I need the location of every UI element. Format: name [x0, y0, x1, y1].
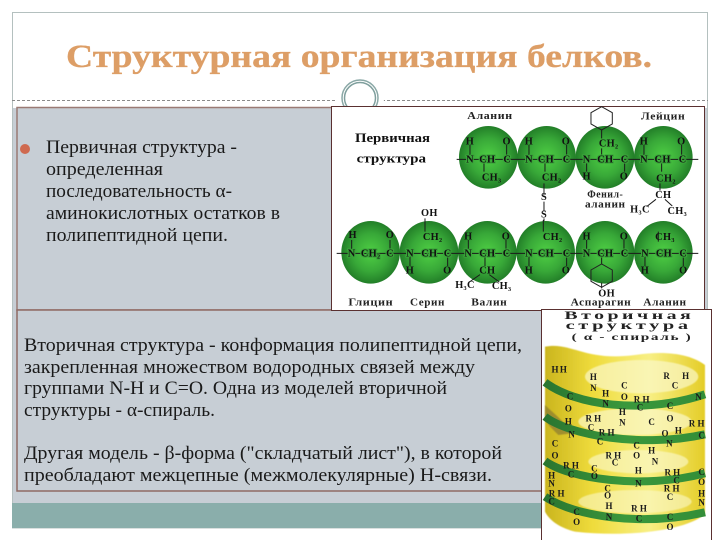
- helix atom labels: N: [568, 430, 575, 440]
- text block: primary structure definition: полипептидной цепи.: [46, 226, 228, 246]
- bottom chain residues: O: [443, 265, 452, 276]
- helix atom labels: R H: [585, 414, 601, 424]
- title: Структурная организация белков.: [66, 39, 652, 75]
- bottom chain residues: N: [583, 248, 591, 259]
- helix atom labels: H: [590, 372, 597, 382]
- helix atom labels: C: [667, 401, 673, 411]
- text block: secondary structure definition: [24, 336, 522, 486]
- top chain residues: [457, 107, 698, 224]
- helix atom labels: O: [604, 490, 611, 500]
- top chain residues: C: [679, 155, 687, 166]
- bottom chain residues: CH₃: [655, 232, 675, 243]
- helix atom labels: C: [548, 496, 555, 506]
- footer band: teal: [12, 503, 708, 528]
- amino acid names: Серин: [410, 298, 445, 309]
- bottom chain residues: CH: [479, 265, 495, 276]
- helix atom labels: N: [635, 479, 642, 489]
- amino acid names: аланин: [585, 199, 626, 210]
- side-chain labels: H₃C: [455, 280, 475, 291]
- top chain residues: O: [502, 136, 511, 147]
- helix atom labels: R: [663, 371, 670, 381]
- helix atom labels: C: [604, 484, 611, 494]
- bottom chain residues: C: [679, 248, 687, 259]
- top chain residues: C: [621, 155, 629, 166]
- helix atom labels: R H: [605, 450, 621, 460]
- helix atom labels: C: [667, 492, 673, 502]
- bottom chain residues: C: [503, 248, 511, 259]
- helix atom labels: O: [698, 477, 705, 487]
- helix atom labels: [548, 364, 705, 532]
- helix heading: структура: [566, 320, 692, 332]
- side-chain labels: [455, 190, 687, 300]
- bottom chain residues: C: [444, 248, 452, 259]
- helix heading: [564, 310, 694, 343]
- helix atom labels: C: [591, 464, 598, 474]
- bottom chain residues: H: [525, 265, 533, 276]
- helix atom labels: N: [602, 399, 609, 409]
- helix atom labels: H: [635, 465, 642, 475]
- dashed title divider: [12, 100, 708, 102]
- bottom chain residues: C: [621, 248, 629, 259]
- helix atom labels: C: [588, 422, 594, 432]
- helix atom labels: C: [568, 470, 574, 480]
- top chain residues: N: [583, 155, 591, 166]
- text block: primary structure definition: определенная: [46, 160, 164, 180]
- helix atom labels: C: [667, 512, 673, 522]
- top chain residues: N: [466, 155, 474, 166]
- amino acid names: Аланин: [467, 111, 513, 122]
- bottom chain residues: O: [562, 265, 570, 276]
- amino acid names: [348, 111, 687, 309]
- side-chain labels: H₃C: [630, 204, 650, 215]
- bottom chain residues: CH: [421, 248, 437, 259]
- text block: secondary structure definition: Другая модель - β-форма ("складчатый лист"), в которой: [24, 444, 502, 464]
- helix atom labels: C: [636, 514, 642, 524]
- bottom chain residues: CH₂: [361, 248, 380, 259]
- helix atom labels: N: [548, 479, 555, 489]
- bottom chain residues: C: [563, 248, 571, 259]
- bottom chain residues: O: [679, 265, 687, 276]
- text block: secondary structure definition: преобладают межцепные (межмолекулярные) H-связи.: [24, 466, 492, 486]
- top chain residues: N: [640, 155, 648, 166]
- helix atom labels: C: [612, 458, 618, 468]
- helix atom labels: C: [552, 439, 558, 449]
- diagram: primary structure peptide chains: [332, 106, 704, 310]
- helix atom labels: N: [666, 439, 673, 449]
- helix atom labels: N: [652, 456, 659, 466]
- amino acid names: Глицин: [348, 298, 393, 309]
- bottom chain residues: H: [406, 265, 414, 276]
- helix atom labels: N: [619, 418, 626, 428]
- helix atom labels: O: [565, 404, 572, 414]
- text block: primary structure definition: [46, 138, 280, 246]
- bottom chain residues: CH: [538, 248, 554, 259]
- bottom chain residues: CH₂: [423, 232, 442, 243]
- text block: primary structure definition: аминокислотных остатков в: [46, 204, 280, 224]
- text block: primary structure definition: Первичная структура -: [46, 138, 237, 158]
- top chain residues: CH: [597, 155, 613, 166]
- helix atom labels: R H: [634, 394, 650, 404]
- amino acid names: Фенил-: [587, 190, 623, 201]
- helix atom labels: O: [666, 522, 673, 532]
- disulfide bridge: S: [541, 192, 547, 203]
- helix green bands: [545, 382, 705, 519]
- text block: secondary structure definition: структуры - α-спираль.: [24, 401, 215, 421]
- helix atom labels: R H: [549, 489, 565, 499]
- top chain residues: CH₃: [482, 173, 501, 184]
- bottom chain residues: N: [525, 248, 533, 259]
- icon: tyrosine ring: [591, 264, 612, 287]
- text block: primary structure definition: последовательность α-: [46, 182, 232, 202]
- helix atom labels: H: [548, 470, 555, 480]
- helix atom labels: H: [648, 445, 655, 455]
- helix atom labels: O: [573, 517, 580, 527]
- amino acid names: Аланин: [643, 298, 687, 309]
- bottom chain residues: CH₂: [543, 232, 562, 243]
- top chain residues: O: [562, 136, 570, 147]
- bottom chain residues: O: [502, 231, 510, 242]
- helix atom labels: H: [602, 389, 609, 399]
- diagram heading: структура: [357, 152, 426, 166]
- helix heading: Вторичная: [564, 310, 694, 322]
- helix atom labels: C: [573, 507, 580, 517]
- text block: secondary structure definition: закрепленная множеством водородных связей между: [24, 358, 476, 378]
- top chain residues: C: [563, 155, 571, 166]
- bottom chain residues: CH: [479, 248, 495, 259]
- helix atom labels: O: [621, 392, 628, 402]
- panel: secondary structure text: [17, 310, 547, 491]
- text block: secondary structure definition: группами N-H и C=O. Одна из моделей вторичной: [24, 379, 447, 399]
- diagram heading: [355, 131, 430, 166]
- helix atom labels: R H: [631, 504, 647, 514]
- bottom chain residues: CH: [597, 248, 613, 259]
- helix atom labels: C: [672, 380, 678, 390]
- top chain residues: CH: [538, 155, 554, 166]
- bottom chain residues: H: [464, 231, 473, 242]
- helix atom labels: H: [675, 425, 682, 435]
- helix atom labels: C: [637, 402, 643, 412]
- top chain residues: CH: [479, 155, 495, 166]
- top chain residues: C: [503, 155, 511, 166]
- side-chain labels: CH: [655, 190, 671, 201]
- helix atom labels: R H: [664, 484, 680, 494]
- bottom chain residues: O: [386, 230, 394, 241]
- helix atom labels: N: [695, 392, 702, 402]
- top chain residues: CH₂: [599, 139, 618, 150]
- bottom chain residues: H: [348, 230, 357, 241]
- text block: secondary structure definition: Вторичная структура - конформация полипептидной цепи,: [24, 336, 522, 356]
- bullet: [20, 144, 30, 154]
- helix atom labels: C: [621, 380, 628, 390]
- helix atom labels: C: [597, 436, 603, 446]
- bottom chain residues: N: [641, 248, 649, 259]
- helix atom labels: H: [682, 371, 689, 381]
- helix atom labels: C: [698, 430, 705, 440]
- top chain residues: O: [677, 136, 685, 147]
- disulfide bridge: S: [541, 209, 547, 220]
- bottom chain residues: O: [620, 231, 628, 242]
- helix atom labels: H: [551, 364, 558, 374]
- top chain residues: N: [525, 155, 533, 166]
- helix atom labels: C: [648, 417, 655, 427]
- helix atom labels: H: [605, 501, 612, 511]
- amino acid names: Аспарагин: [571, 298, 631, 309]
- helix atom labels: R H: [664, 468, 680, 478]
- bottom chain residues: OH: [421, 208, 438, 219]
- helix atom labels: R H: [563, 460, 579, 470]
- helix atom labels: C: [567, 392, 573, 402]
- background band: grey-blue: [13, 108, 707, 503]
- bottom chain residues: N: [348, 248, 356, 259]
- helix atom labels: O: [633, 450, 640, 460]
- helix atom labels: R H: [689, 419, 705, 429]
- top chain residues: CH: [655, 155, 671, 166]
- icon: phenyl ring: [591, 107, 612, 130]
- top chain residues: CH₂: [542, 173, 561, 184]
- top chain residues: H: [640, 136, 648, 147]
- bottom chain residues: H: [582, 231, 591, 242]
- side-chain labels: CH₃: [668, 206, 687, 217]
- top chain residues: O: [620, 171, 628, 182]
- helix atom labels: N: [606, 512, 613, 522]
- amino acid names: Валин: [471, 298, 507, 309]
- disulfide bridge: [541, 192, 547, 220]
- top chain residues: CH₂: [656, 174, 676, 185]
- bottom chain residues: [337, 208, 698, 288]
- bottom chain residues: H: [641, 265, 649, 276]
- helix atom labels: N: [698, 498, 705, 508]
- helix heading: ( α - спираль ): [572, 332, 692, 343]
- bottom chain residues: N: [464, 248, 472, 259]
- top chain residues: H: [466, 136, 474, 147]
- helix atom labels: H: [619, 407, 626, 417]
- helix atom labels: H: [698, 489, 705, 499]
- bottom chain residues: C: [386, 248, 394, 259]
- bottom chain residues: N: [406, 248, 414, 259]
- helix atom labels: N: [590, 383, 597, 393]
- helix body: [545, 346, 705, 534]
- helix atom labels: H: [560, 364, 567, 374]
- ornament: double ring: [336, 74, 384, 122]
- illustration: alpha helix: [542, 310, 712, 540]
- panel: primary structure text: [17, 108, 347, 310]
- helix atom labels: C: [633, 440, 640, 450]
- helix atom labels: O: [666, 414, 673, 424]
- side-chain labels: OH: [598, 289, 615, 300]
- amino acid names: Лейцин: [641, 112, 685, 123]
- top chain residues: H: [582, 171, 591, 182]
- helix atom labels: R H: [599, 428, 615, 438]
- helix atom labels: C: [673, 476, 680, 486]
- diagram heading: Первичная: [355, 131, 430, 145]
- top chain residues: H: [525, 136, 533, 147]
- side-chain labels: CH₃: [492, 281, 511, 292]
- helix atom labels: H: [565, 416, 572, 426]
- helix atom labels: O: [551, 450, 558, 460]
- helix atom labels: O: [661, 429, 668, 439]
- bottom chain residues: CH: [656, 248, 672, 259]
- helix atom labels: C: [698, 467, 705, 477]
- helix atom labels: O: [591, 471, 598, 481]
